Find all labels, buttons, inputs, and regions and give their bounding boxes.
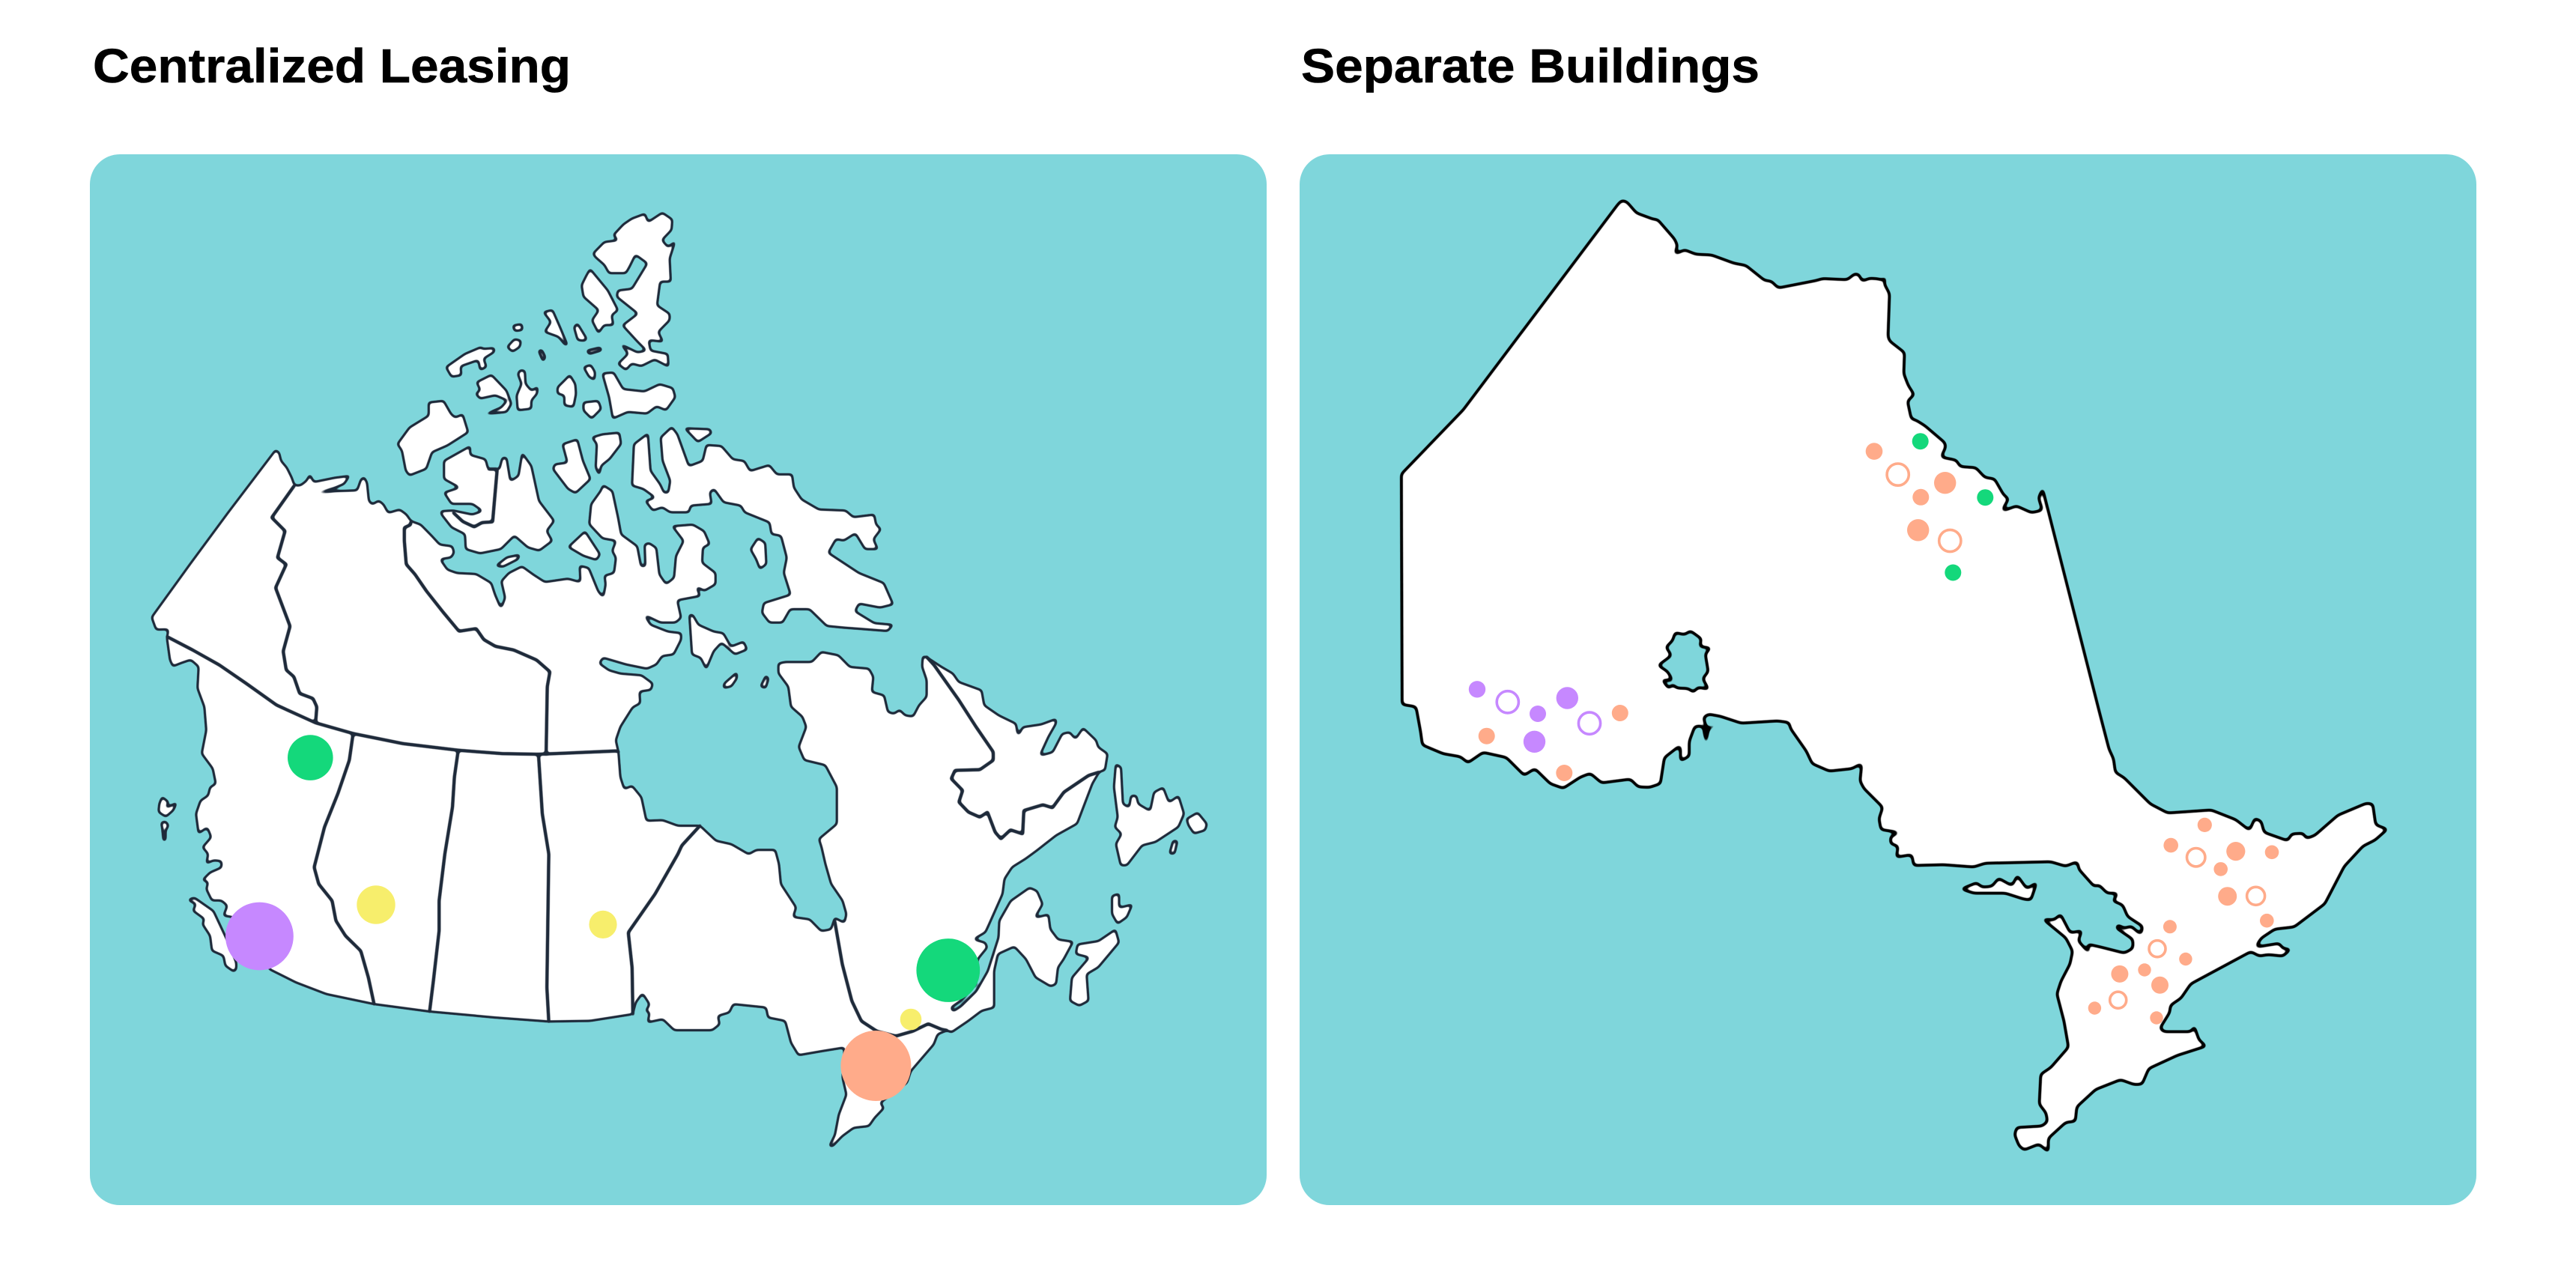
Manitoulin Island: [1960, 875, 2037, 900]
Ontario land: [1401, 200, 2388, 1153]
title: Centralized Leasing: Centralized Leasing: [93, 39, 571, 93]
markers: northwestern cluster: [1469, 681, 1628, 781]
title: Separate Buildings: Separate Buildings: [1301, 39, 1760, 93]
marker: yellow Ottawa: [900, 1009, 921, 1030]
marker: green Quebec: [916, 938, 980, 1002]
atlantic islands: [1070, 764, 1207, 1006]
markers: northeastern cluster: [1866, 433, 1993, 581]
marker: peach Toronto: [840, 1031, 911, 1101]
land masses: [151, 212, 1207, 1147]
pacific islands: [158, 796, 237, 972]
arctic islands: [397, 212, 894, 688]
map: Ontario: [1401, 200, 2388, 1153]
Ontario mainland: [1401, 200, 2388, 1153]
province and territory borders: [167, 469, 1100, 1036]
marker: yellow Alberta: [357, 885, 396, 924]
mainland Canada: [151, 449, 1108, 1147]
marker: purple Vancouver: [225, 903, 294, 970]
panel: Separate Buildings: [1300, 154, 2476, 1205]
Lake Nipigon: [1658, 631, 1712, 693]
map: Canada: [151, 212, 1207, 1147]
panel: Centralized Leasing: [90, 154, 1267, 1205]
marker: green Alberta/BC north: [288, 735, 333, 780]
markers: southern Ontario cluster: [2088, 818, 2279, 1025]
marker: yellow Manitoba: [589, 911, 617, 938]
